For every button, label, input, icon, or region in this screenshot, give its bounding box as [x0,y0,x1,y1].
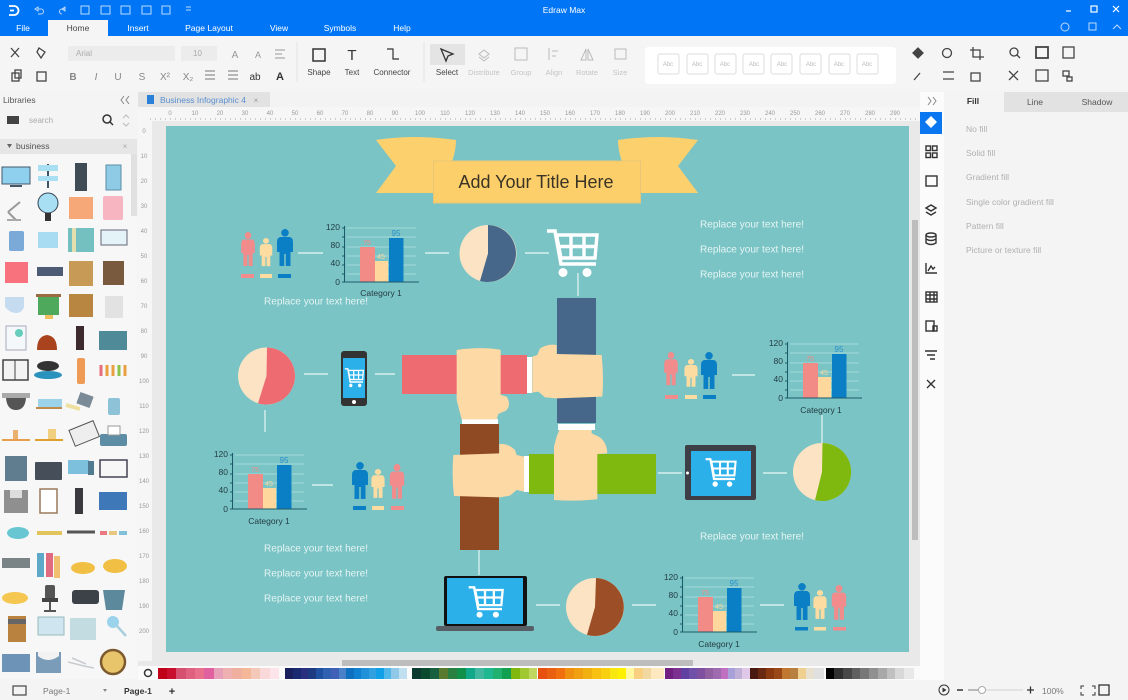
libraries panel header: search [29,116,53,125]
libraries panel header: business [16,141,50,151]
text format buttons [69,71,284,83]
arm: brown sleeve [460,424,499,550]
horizontal ruler: 160 [565,111,576,117]
bar chart top left: 40 [331,258,340,268]
text block top right [700,218,804,280]
right properties panel: Picture or texture fill [966,245,1041,255]
ribbon toolbar: Select [436,68,459,77]
people group lower left [352,462,404,510]
bar chart lower left: 120 [214,449,228,459]
ribbon toolbar: Abc [692,62,702,68]
fill options: No fill [966,124,987,134]
horizontal ruler: 150 [540,111,551,117]
library row 10 [5,456,127,481]
bar chart right: 80 [774,356,783,366]
right properties panel: Fill [967,96,979,106]
bar chart lower left: 75 [251,467,259,474]
vertical ruler: 50 [141,254,148,260]
text block lower left [264,542,368,604]
bar chart lower left: 0 [223,504,228,514]
horizontal ruler: 60 [317,111,324,117]
select tool [430,44,465,65]
bar chart top left: 95 [392,229,401,238]
horizontal ruler: 200 [665,111,676,117]
bar chart bottom [664,572,757,649]
active fill icon [920,112,942,134]
library row 4 [5,261,124,286]
people group bottom [794,583,846,630]
library row 15 [8,616,126,642]
menu tabs: Insert [127,23,149,33]
ribbon toolbar: Group [511,68,531,77]
library row 6 [6,326,127,350]
vertical ruler: 100 [139,379,150,385]
ribbon toolbar: Connector [374,68,411,77]
horizontal ruler: 130 [490,111,501,117]
vertical ruler: 30 [141,204,148,210]
horizontal ruler: 290 [890,111,901,117]
text format buttons: A [276,71,284,83]
cream hands [453,345,607,501]
people group right [664,352,717,399]
horizontal ruler [138,107,920,121]
bar chart top left: 75 [363,240,371,247]
horizontal ruler: 270 [840,111,851,117]
ribbon toolbar: A [232,50,239,61]
vertical ruler: 10 [141,154,148,160]
library row 11 [4,488,127,514]
text format buttons: I [95,72,98,83]
bar chart right: 0 [778,393,783,403]
horizontal ruler: 50 [292,111,299,117]
bar chart bottom: 95 [730,579,739,588]
vertical ruler: 130 [139,454,150,460]
library row 12 [7,527,127,539]
bar chart lower left: 95 [280,456,289,465]
vertical ruler: 170 [139,554,150,560]
connector lines [265,253,822,605]
icon: white shopping cart [547,231,597,277]
side tool icons [925,146,937,388]
colour palette [138,666,920,680]
pie chart red [238,348,295,404]
library row 5 [5,294,123,319]
horizontal ruler: 80 [367,111,374,117]
vertical ruler: 20 [141,179,148,185]
text block lower left: Replace your text here! [264,592,368,604]
bar chart top left: 80 [331,240,340,250]
text block lower right: Replace your text here! [700,530,804,542]
text block top right: Replace your text here! [700,268,804,280]
text block top right: Replace your text here! [700,244,804,256]
bar chart bottom: 0 [673,627,678,637]
scrollbars [342,220,918,666]
right properties panel: Pattern fill [966,221,1004,231]
menu tabs: Home [67,23,90,33]
horizontal ruler: 30 [242,111,249,117]
library row 1 [2,163,121,191]
bottom status bar: Page-1 [124,686,152,696]
white cuffs [462,357,595,492]
menu tabs: Page Layout [185,23,234,33]
canvas workspace [138,92,920,680]
library row 9 [2,421,127,446]
connector tool [387,49,399,59]
ribbon toolbar: Arial [76,49,92,58]
vertical ruler: 120 [139,429,150,435]
horizontal ruler: 170 [590,111,601,117]
bar chart right [769,338,862,415]
quick access icons [35,6,191,14]
ribbon toolbar: Abc [862,62,872,68]
text block top left: Replace your text here! [264,296,368,308]
app name: Edraw Max [543,5,586,15]
bar chart right: 40 [774,374,783,384]
vertical ruler: 160 [139,529,150,535]
title bar [0,0,1128,36]
ribbon toolbar: Abc [663,62,673,68]
format icons [913,47,1074,81]
vertical ruler: 200 [139,629,150,635]
vertical ruler: 110 [139,404,149,410]
text format buttons: ab [249,72,261,83]
horizontal ruler: 250 [790,111,801,117]
bar chart right: 120 [769,338,783,348]
horizontal ruler: 230 [740,111,751,117]
text block lower left: Replace your text here! [264,568,368,580]
horizontal ruler: 10 [192,111,199,117]
right properties panel [920,92,1128,680]
bar chart right: 95 [835,345,844,354]
window controls [1066,6,1119,12]
right properties panel: Gradient fill [966,172,1009,182]
bar chart bottom: Category 1 [698,639,740,649]
vertical ruler: 150 [139,504,150,510]
horizontal ruler: 20 [217,111,224,117]
ribbon toolbar: Size [613,68,627,77]
text block top right: Replace your text here! [700,218,804,230]
shape tool [313,49,325,61]
icon: laptop with cart [436,576,534,631]
horizontal ruler: 190 [640,111,651,117]
menu tabs: File [16,23,30,33]
library row 13 [2,553,127,578]
people group top left [241,229,293,278]
bar chart top left: Category 1 [360,288,402,298]
text format buttons: X₂ [183,72,193,83]
bottom status bar: Page-1 [43,686,71,696]
horizontal ruler: 260 [815,111,826,117]
vertical ruler [138,121,152,661]
vertical ruler: 40 [141,229,148,235]
bar chart lower left [214,449,307,526]
four hands teamwork illustration [402,298,656,550]
horizontal ruler: 140 [515,111,526,117]
horizontal ruler: 100 [415,111,426,117]
text format buttons: B [69,72,77,83]
horizontal ruler: 240 [765,111,776,117]
icon: tablet with cart [685,445,756,500]
document tab: × [254,96,259,105]
arm: red sleeve [402,355,527,394]
ribbon toolbar: Abc [720,62,730,68]
vertical ruler: 80 [141,329,148,335]
libraries panel header: Libraries [3,95,36,105]
disabled tools [479,48,626,61]
ribbon toolbar: Text [345,68,360,77]
horizontal ruler: 210 [690,111,701,117]
document tab [138,92,920,107]
libraries panel header [0,95,137,154]
clipboard icons [11,48,46,81]
bottom status bar: + [169,686,175,698]
horizontal ruler: 0 [168,111,172,117]
menu tabs: Help [393,23,411,33]
text tool: T [347,47,357,64]
text format buttons: X² [160,72,171,83]
zoom controls [939,685,949,695]
menu tabs [16,20,411,38]
libraries panel header: × [123,142,128,151]
bar chart bottom: 80 [669,590,678,600]
horizontal ruler: 280 [865,111,876,117]
bar chart lower left: 80 [219,467,228,477]
text format buttons: U [114,72,122,83]
document tab: Business Infographic 4 [160,95,246,105]
ribbon toolbar: Abc [777,62,787,68]
account icons [1061,23,1121,31]
library row 16 [2,650,125,674]
bar chart lower left: 45 [265,481,273,488]
bottom status bar: 100% [1042,686,1064,696]
vertical ruler: 70 [141,304,148,310]
ribbon toolbar: Align [546,68,562,77]
pie chart navy [460,225,516,282]
panel tabs [1004,92,1128,112]
vertical ruler: 90 [141,354,148,360]
shape library icon grid [0,154,137,679]
bar chart top left: 45 [377,254,385,261]
ribbon toolbar: Abc [806,62,816,68]
icon: smartphone with cart [341,351,367,406]
menu tabs: View [270,23,289,33]
pie chart brown [566,578,624,636]
ribbon toolbar: 10 [193,49,202,58]
title ribbon [376,137,698,203]
horizontal ruler: 40 [267,111,274,117]
vertical ruler: 190 [139,604,150,610]
bar chart bottom: 120 [664,572,678,582]
bar chart lower left: 40 [219,485,228,495]
horizontal ruler: 70 [342,111,349,117]
bar chart bottom: 75 [701,590,709,597]
library row 8 [2,392,120,415]
library row 2 [7,193,123,221]
horizontal ruler: 220 [715,111,726,117]
ribbon toolbar: Shape [307,68,331,77]
right properties panel: Solid fill [966,148,995,158]
vertical ruler: 0 [142,129,146,135]
right properties panel: Shadow [1082,97,1113,107]
ribbon toolbar: A [255,50,261,60]
teal infographic page [166,126,909,652]
text block lower left: Replace your text here! [264,542,368,554]
arm: navy sleeve [557,298,596,423]
library row 14 [2,585,125,611]
bar chart top left [326,222,419,298]
title text: Add Your Title Here [458,172,614,192]
bar chart right: 75 [806,356,814,363]
text format buttons: S [139,72,146,83]
bar chart bottom: 45 [715,604,723,611]
bottom status bar [0,680,1128,700]
style gallery [645,47,896,84]
bar chart right: Category 1 [800,405,842,415]
ribbon toolbar [0,36,1128,90]
horizontal ruler: 120 [465,111,476,117]
bar chart lower left: Category 1 [248,516,290,526]
horizontal ruler: 180 [615,111,626,117]
bar chart top left: 0 [335,277,340,287]
arm: green sleeve [529,454,656,494]
vertical ruler: 60 [141,279,148,285]
horizontal ruler: 110 [440,111,450,117]
ribbon toolbar: Distribute [468,68,500,77]
bar chart top left: 120 [326,222,340,232]
horizontal ruler: 90 [392,111,399,117]
bar chart right: 45 [820,370,828,377]
ribbon toolbar: Abc [749,62,759,68]
app logo [9,6,18,15]
right properties panel: Line [1027,97,1043,107]
vertical ruler: 180 [139,579,150,585]
vertical ruler: 140 [139,479,150,485]
library row 7 [3,358,125,384]
right properties panel: Single color gradient fill [966,197,1054,207]
ribbon toolbar: Abc [834,62,844,68]
library row 3 [9,228,127,252]
menu tabs: Symbols [324,23,356,33]
ribbon toolbar: Rotate [576,68,598,77]
pie chart green [793,443,851,501]
font controls [68,46,175,61]
bar chart bottom: 40 [669,608,678,618]
